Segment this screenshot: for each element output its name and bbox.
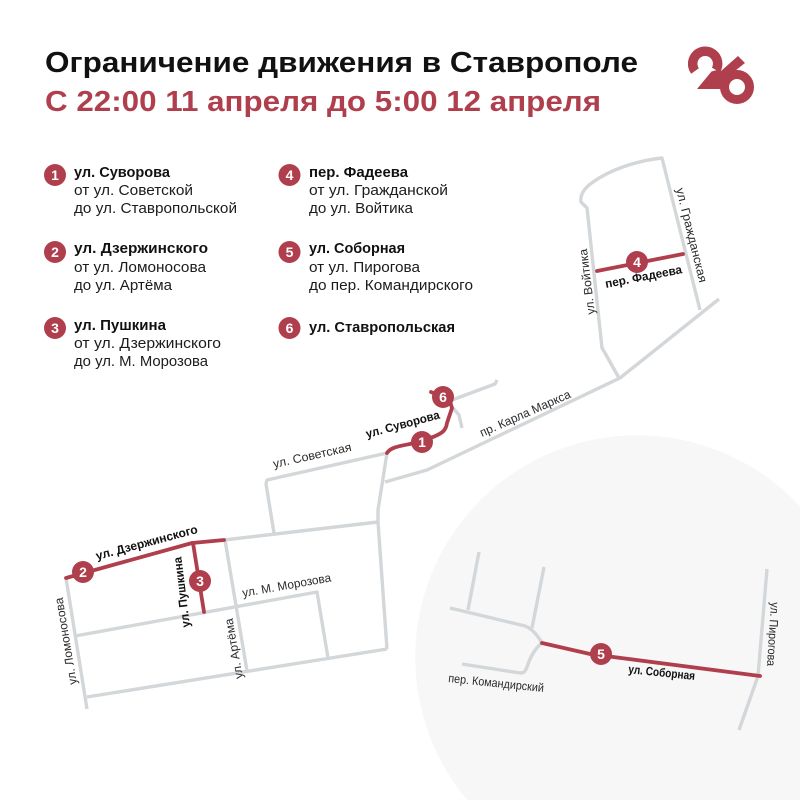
street labels: ул. Советская: [272, 440, 353, 471]
street labels: пер. Фадеева: [604, 262, 683, 291]
map: grey roads around Sobornaya: [450, 552, 767, 730]
marker 5: [590, 643, 612, 665]
list item 3: до ул. М. Морозова: [74, 354, 209, 370]
list item 4: 4: [286, 167, 294, 183]
title: [45, 47, 638, 118]
list item 3: ул. Пушкина: [74, 318, 167, 334]
list item 3: 3: [51, 320, 59, 336]
marker 2: [72, 561, 94, 583]
street labels: ул. М. Морозова: [241, 570, 332, 600]
list item 3: [44, 317, 221, 370]
list item 1: от ул. Советской: [74, 183, 193, 199]
marker 4: 4: [633, 254, 641, 270]
street labels: ул. Гражданская: [673, 186, 710, 284]
marker 4: [626, 251, 648, 273]
list item 4: [278, 164, 448, 217]
map: western grey roads: [66, 453, 387, 709]
list item 5: ул. Соборная: [309, 241, 405, 257]
street labels: ул. Пирогова: [764, 602, 782, 667]
street labels: ул. Соборная: [628, 662, 696, 683]
street labels: ул. Дзержинского: [94, 522, 199, 563]
list item 2: 2: [51, 244, 59, 260]
list item 2: [44, 241, 208, 294]
background circle panel: [415, 435, 800, 800]
list item 1: [44, 164, 237, 217]
marker 1: 1: [418, 434, 426, 450]
list item 5: от ул. Пирогова: [309, 260, 421, 276]
list item 1: 1: [51, 167, 59, 183]
marker 6: [432, 386, 454, 408]
list item 4: до ул. Войтика: [309, 201, 414, 217]
list item 5: 5: [286, 244, 294, 260]
marker 1: [411, 431, 433, 453]
route: пер. Фадеева: [597, 254, 683, 271]
list item 6: 6: [286, 320, 294, 336]
icon: logo 26: [693, 51, 750, 100]
list item 5: до пер. Командирского: [309, 278, 473, 294]
title: Ограничение движения в Ставрополе: [45, 47, 638, 79]
street labels: ул. Артёма: [222, 617, 246, 680]
street labels: [52, 186, 782, 695]
map: eastern grey roads: [385, 158, 719, 482]
list item 2: до ул. Артёма: [74, 278, 173, 294]
marker 3: [189, 570, 211, 592]
marker 3: 3: [196, 573, 204, 589]
route: ул. Дзержинского: [66, 540, 224, 578]
route: ул. Суворова: [387, 398, 452, 453]
street labels: пр. Карла Маркса: [478, 387, 573, 440]
list item 6: ул. Ставропольская: [309, 320, 455, 336]
street labels: ул. Войтика: [576, 248, 598, 315]
list item 5: [278, 241, 473, 294]
street labels: ул. Пушкина: [170, 556, 193, 628]
list item 6: [278, 317, 455, 339]
marker 2: 2: [79, 564, 87, 580]
list item 2: ул. Дзержинского: [74, 241, 208, 257]
marker 5: 5: [597, 646, 605, 662]
route: ул. Ставропольская: [431, 392, 443, 397]
list item 4: от ул. Гражданской: [309, 183, 448, 199]
list item 1: ул. Суворова: [74, 165, 171, 181]
street labels: пер. Командирский: [448, 671, 545, 695]
list item 1: до ул. Ставропольской: [74, 201, 237, 217]
street labels: ул. Суворова: [364, 408, 441, 441]
street labels: ул. Ломоносова: [52, 596, 80, 686]
title: С 22:00 11 апреля до 5:00 12 апреля: [45, 86, 601, 118]
list item 4: пер. Фадеева: [309, 165, 409, 181]
route: ул. Пушкина: [193, 543, 204, 612]
list item 2: от ул. Ломоносова: [74, 260, 207, 276]
marker 6: 6: [439, 389, 447, 405]
route: ул. Соборная: [542, 643, 760, 676]
list item 3: от ул. Дзержинского: [74, 336, 221, 352]
